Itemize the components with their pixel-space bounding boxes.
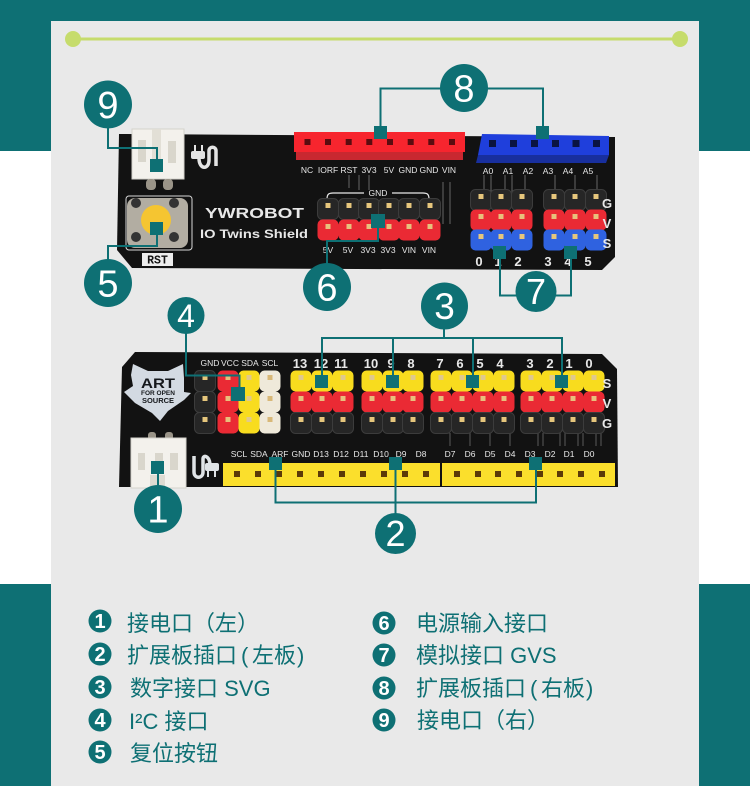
callout 2 <box>269 457 542 554</box>
digital group number labels: 1 <box>565 356 573 371</box>
SVG side labels: V <box>603 396 612 411</box>
bottom header labels: D1 <box>564 449 575 459</box>
I2C header labels: SCL <box>262 358 279 368</box>
I2C header labels <box>201 358 279 368</box>
digital group number labels: 2 <box>546 356 554 371</box>
analog GVS and number labels: V <box>603 216 612 231</box>
top decorative green line with end dots <box>65 31 688 47</box>
board body <box>119 352 618 487</box>
legend item 5 <box>88 740 218 766</box>
legend item 2 <box>88 642 304 668</box>
top header labels <box>301 165 593 176</box>
board: top right-side shield <box>117 129 615 270</box>
bottom header labels: D10 <box>373 449 389 459</box>
callout 4: 4 <box>177 298 195 334</box>
callout 5 <box>84 222 163 307</box>
digital group number labels: 7 <box>436 356 444 371</box>
legend item 6: 6 <box>378 613 390 635</box>
bottom header labels: D12 <box>333 449 349 459</box>
legend item 2: ) <box>297 643 304 668</box>
analog GVS and number labels: G <box>602 196 612 211</box>
digital group number labels: 4 <box>496 356 504 371</box>
top header labels: A5 <box>583 166 593 176</box>
callout 5: 5 <box>97 264 119 306</box>
legend item 8: ( <box>530 676 538 701</box>
callout 1: 1 <box>147 490 169 532</box>
power pin labels <box>323 245 436 255</box>
analog GVS and number labels <box>475 196 612 269</box>
board body <box>117 134 615 270</box>
I2C header labels: VCC <box>221 358 239 368</box>
callout 7 <box>493 246 577 312</box>
digital group number labels: 11 <box>334 356 348 371</box>
bottom header labels: GND <box>292 449 310 459</box>
legend item 8 <box>372 676 593 701</box>
callout 1 <box>134 461 182 533</box>
callout 3: 3 <box>434 286 455 327</box>
bottom header labels: ARF <box>272 449 288 459</box>
I2C header labels: GND <box>201 358 219 368</box>
top header labels: 5V <box>384 165 395 175</box>
digital group number labels: 10 <box>364 356 378 371</box>
icon: plug <box>194 456 219 477</box>
digital group number labels: 13 <box>293 356 307 371</box>
logo: art for open source cat <box>124 364 191 421</box>
I2C pin columns <box>194 370 280 434</box>
icon: plug <box>191 145 216 167</box>
top header labels: GND <box>420 165 438 175</box>
legend item 2: ( <box>241 643 249 668</box>
analog GVS and number labels: 1 <box>494 254 502 269</box>
bottom header labels: D2 <box>545 449 556 459</box>
white power connector <box>131 432 186 488</box>
callout 4 <box>168 297 245 401</box>
legend item 5: 复位按钮 <box>130 741 218 766</box>
legend item 2: 扩展板插口 <box>127 643 237 668</box>
power pin labels: 5V <box>323 245 334 255</box>
GND bracket label <box>327 188 429 199</box>
bottom header labels: D9 <box>396 449 407 459</box>
legend item 9: 9 <box>378 710 390 732</box>
digital group number labels: 0 <box>585 356 593 371</box>
reset button <box>126 196 192 250</box>
legend item 7: 模拟接口 GVS <box>416 643 557 668</box>
legend item 8: 扩展板插口 <box>416 676 526 701</box>
logo: art for open source cat: FOR OPEN <box>141 390 175 397</box>
power pin labels: 3V3 <box>380 245 396 255</box>
digital group number labels: 12 <box>314 356 328 371</box>
white power connector <box>132 129 184 190</box>
top header labels: A0 <box>483 166 493 176</box>
digital group number labels: 6 <box>456 356 464 371</box>
traces <box>450 433 601 446</box>
top header labels: IORF <box>318 165 338 175</box>
SVG side labels: G <box>602 416 612 431</box>
legend item 2: 2 <box>94 644 106 666</box>
legend item 6: 电源输入接口 <box>416 611 548 636</box>
top header labels: A2 <box>523 166 533 176</box>
callout 9: 9 <box>97 85 119 127</box>
legend item 8: 8 <box>378 678 390 700</box>
analog GVS and number labels: 4 <box>564 254 572 269</box>
top header labels: A4 <box>563 166 573 176</box>
legend item 4 <box>88 708 208 734</box>
logo: art for open source cat: ART <box>141 375 176 391</box>
bottom header labels <box>231 449 595 459</box>
bottom header labels: D5 <box>485 449 496 459</box>
legend item 4: I²C 接口 <box>129 709 208 734</box>
board: bottom left-side shield <box>119 352 618 488</box>
yellow socket headers <box>223 463 615 486</box>
bottom header labels: D8 <box>416 449 427 459</box>
digital group number labels <box>293 356 593 371</box>
RST label: RST <box>147 254 168 268</box>
digital pin rows <box>290 370 604 434</box>
legend item 1: 1 <box>94 611 106 633</box>
product name: IO Twins Shield <box>200 227 308 241</box>
top header labels: 3V3 <box>361 165 377 175</box>
legend item 7: 7 <box>378 645 390 667</box>
callout 9 <box>84 80 163 172</box>
brand text: YWROBOT <box>205 205 304 222</box>
top header labels: RST <box>340 165 358 175</box>
SVG side labels <box>602 376 612 431</box>
power pin labels: VIN <box>402 245 416 255</box>
bottom header labels: SDA <box>250 449 268 459</box>
callout 6: 6 <box>316 268 338 310</box>
bottom header labels: D0 <box>584 449 595 459</box>
I2C header labels: SDA <box>241 358 259 368</box>
digital group number labels: 8 <box>407 356 415 371</box>
legend item 3: 3 <box>94 677 106 699</box>
top header labels: VIN <box>442 165 456 175</box>
analog GVS and number labels: S <box>603 236 612 251</box>
legend item 5: 5 <box>94 742 106 764</box>
callout 7: 7 <box>526 271 546 312</box>
bottom header labels: D6 <box>465 449 476 459</box>
legend item 8: ) <box>586 676 593 701</box>
bottom header labels: D4 <box>505 449 516 459</box>
top header labels: GND <box>399 165 417 175</box>
digital group number labels: 5 <box>476 356 484 371</box>
RST label <box>142 253 173 268</box>
callout 8: 8 <box>453 68 475 110</box>
top header labels: A3 <box>543 166 553 176</box>
bottom header labels: D13 <box>313 449 329 459</box>
analog GVS and number labels: 5 <box>584 254 592 269</box>
legend: right column <box>372 611 593 733</box>
blue socket header <box>476 134 609 163</box>
legend item 9: 接电口（右） <box>417 708 549 733</box>
analog pin header rows <box>470 190 606 250</box>
bottom header labels: D3 <box>525 449 536 459</box>
digital group number labels: 9 <box>387 356 395 371</box>
analog GVS and number labels: 2 <box>514 254 522 269</box>
power pin labels: VIN <box>422 245 436 255</box>
SVG side labels: S <box>603 376 612 391</box>
callout 8 <box>374 64 549 139</box>
logo: art for open source cat: SOURCE <box>142 396 174 405</box>
top header labels: A1 <box>503 166 513 176</box>
legend item 3: 数字接口 SVG <box>130 676 271 701</box>
digital group number labels: 3 <box>526 356 534 371</box>
bottom header labels: D7 <box>445 449 456 459</box>
callout 2: 2 <box>385 513 406 554</box>
callout 3 <box>315 282 568 388</box>
power pin header rows <box>318 198 440 240</box>
legend: left column <box>88 610 304 766</box>
legend item 2: 左板 <box>252 643 296 668</box>
bottom header labels: SCL <box>231 449 248 459</box>
GND bracket label: GND <box>369 188 387 198</box>
traces <box>349 175 597 224</box>
bottom header labels: D11 <box>354 449 369 459</box>
legend item 1: 接电口（左） <box>127 611 259 636</box>
red socket header <box>294 132 465 160</box>
callout 6 <box>303 214 385 311</box>
legend item 8: 右板 <box>541 676 585 701</box>
power pin labels: 5V <box>343 245 354 255</box>
power pin labels: 3V3 <box>360 245 376 255</box>
top header labels: NC <box>301 165 313 175</box>
analog GVS and number labels: 3 <box>544 254 552 269</box>
legend item 4: 4 <box>94 710 106 732</box>
analog GVS and number labels: 0 <box>475 254 483 269</box>
